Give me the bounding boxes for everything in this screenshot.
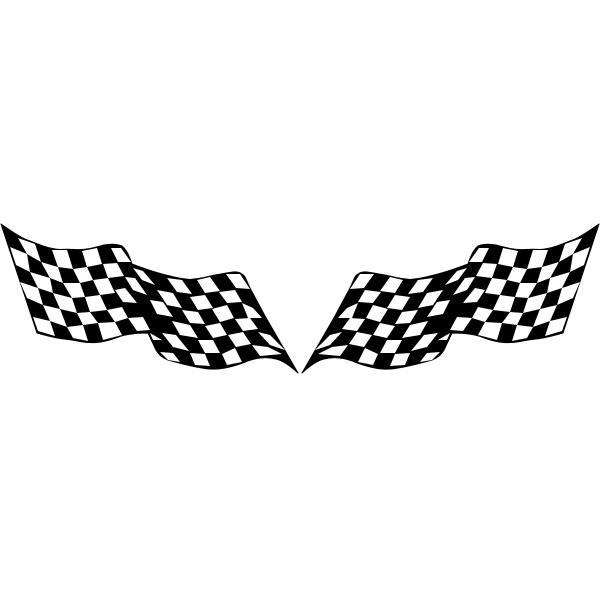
left checkered flag <box>1 224 298 373</box>
right checkered flag <box>302 224 599 373</box>
